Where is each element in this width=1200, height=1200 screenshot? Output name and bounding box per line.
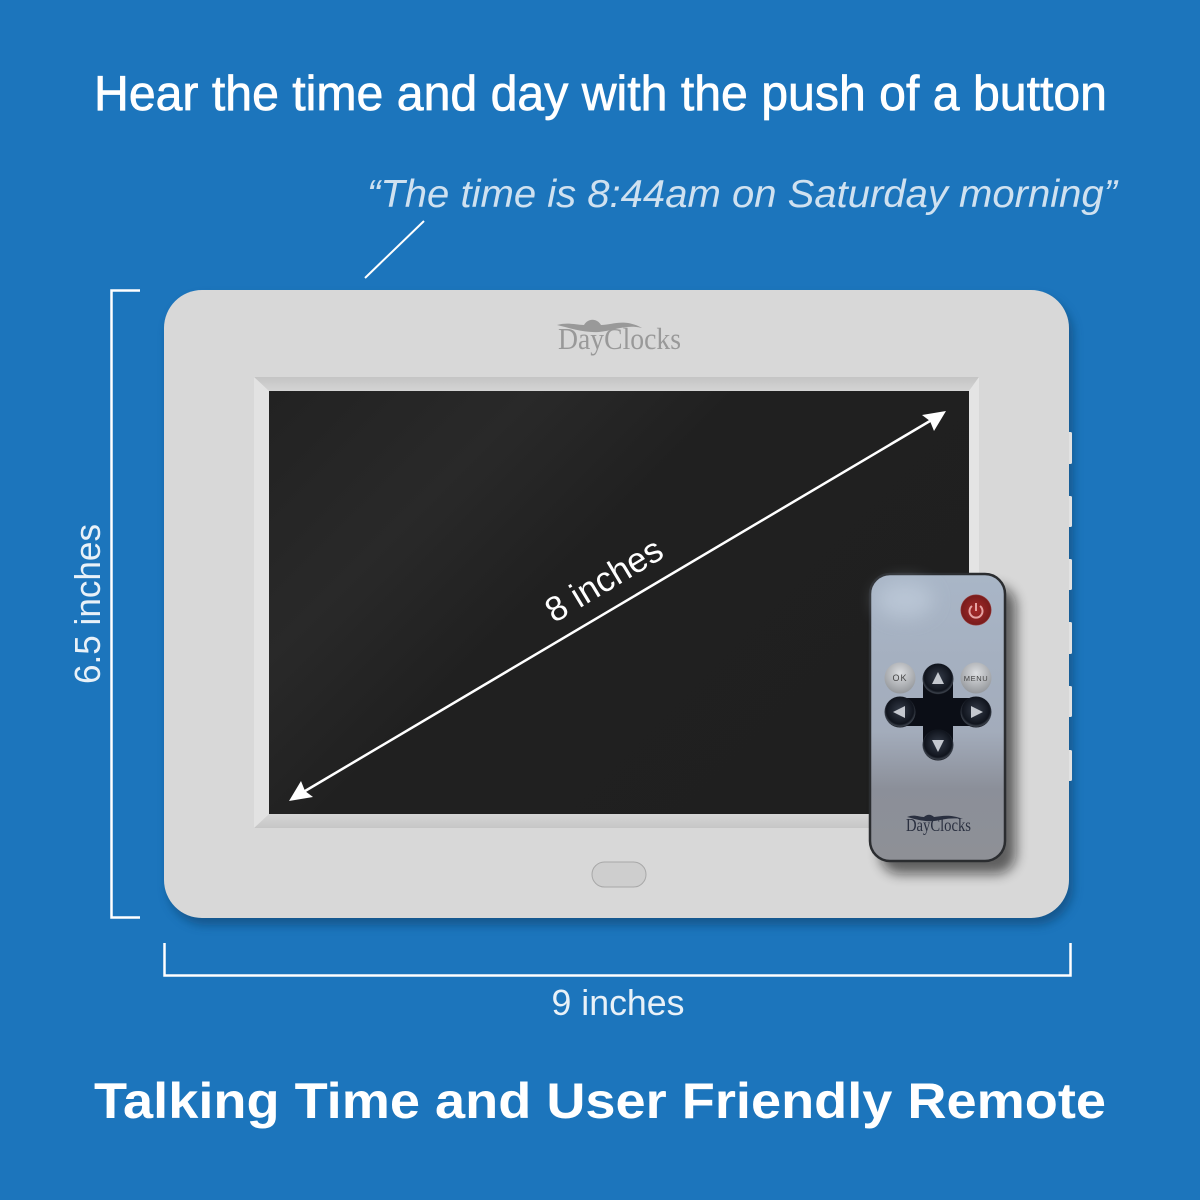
remote control [870,574,1016,874]
menu button [960,662,992,694]
spoken time quote: “The time is 8:44am on Saturday morning” [367,173,1119,216]
side buttons [1066,432,1072,781]
title: Hear the time and day with the push of a button [94,67,1107,121]
OK button: OK [892,673,908,683]
digital clock frame [164,290,1073,925]
width dimension: 9 inches [552,982,684,1023]
home button [592,862,646,887]
diagonal size label: 8 inches [538,530,670,630]
remote logo: DayClocks [906,815,971,835]
diagonal arrow [289,411,946,801]
width dimension [164,943,1070,1023]
height dimension: 6.5 inches [67,524,108,684]
screen [269,391,969,814]
logo: DayClocks [558,321,681,356]
screen bevel [254,377,979,828]
directional pad [884,664,992,760]
callout line [365,221,424,278]
brushed metal sheen [877,582,933,618]
bottom heading: Talking Time and User Friendly Remote [94,1073,1106,1129]
power button [960,594,992,626]
menu button: MENU [964,674,988,683]
OK button [884,662,916,694]
height dimension [67,290,140,918]
